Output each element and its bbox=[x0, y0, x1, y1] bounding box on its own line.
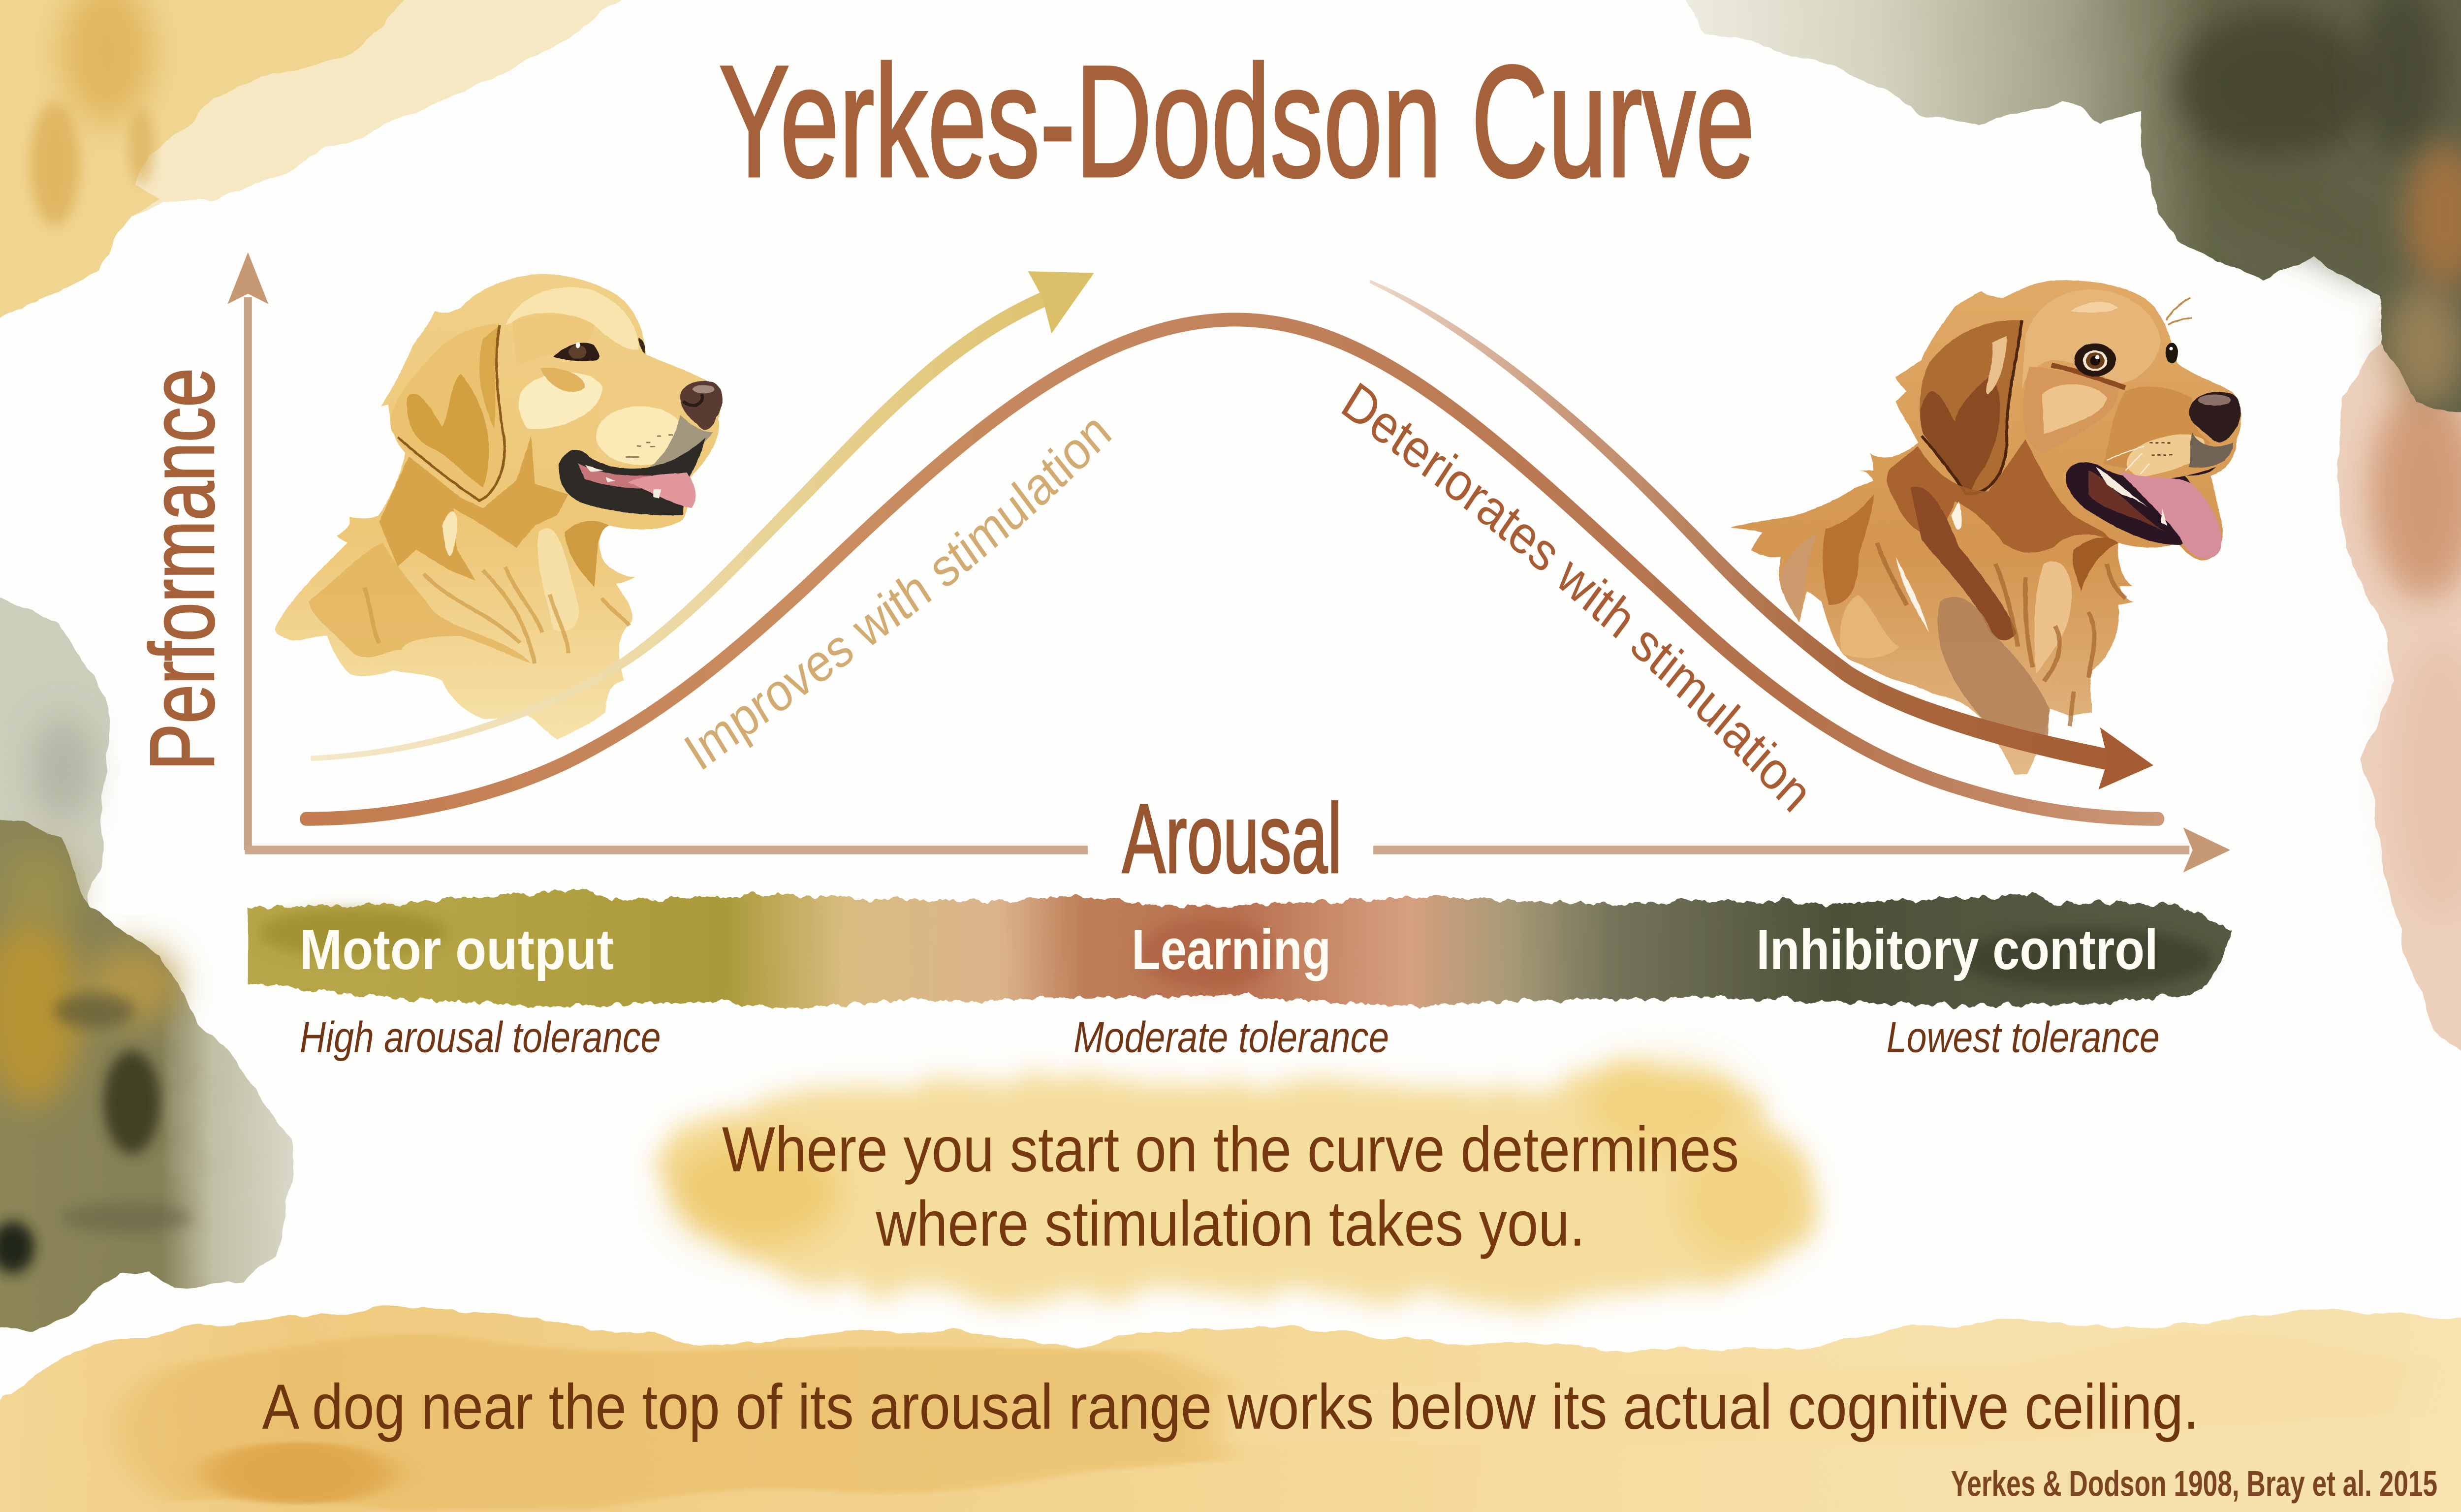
watercolor wash: top-left bbox=[0, 0, 625, 321]
dog 2 wide eye bbox=[2074, 343, 2178, 377]
watercolor wash: left bbox=[0, 598, 293, 1332]
dog: calm golden retriever bbox=[275, 274, 723, 739]
banner: functions by arousal tolerance bbox=[246, 889, 2232, 1009]
dog 2 silhouette bbox=[1731, 280, 2241, 774]
yellow arrow: improves bbox=[311, 271, 1094, 761]
brown arrow: deteriorates bbox=[1370, 280, 2153, 789]
dog 1 ear bbox=[390, 323, 505, 501]
banner label: motor output: Motor output bbox=[300, 918, 614, 981]
y axis label: Performance bbox=[131, 368, 233, 770]
dog 2 ear bbox=[1920, 320, 2021, 495]
tolerance note: lowest: Lowest tolerance bbox=[1887, 1013, 2160, 1061]
dog 2 nose bbox=[2189, 392, 2240, 442]
dog 1 face markings bbox=[505, 287, 713, 467]
dog 2 whisker hairs bbox=[2166, 298, 2192, 325]
conclusion statement bbox=[722, 1114, 1739, 1260]
dog 2 open mouth and tongue bbox=[2066, 462, 2221, 559]
bell curve bbox=[306, 319, 2158, 819]
banner label: learning: Learning bbox=[1132, 918, 1331, 981]
x axis label: Arousal bbox=[1122, 783, 1342, 893]
dog 2 neck fur bbox=[1781, 440, 2125, 743]
deteriorates text: Deteriorates with stimulation bbox=[1341, 382, 1805, 813]
improves text: Improves with stimulation bbox=[684, 420, 1112, 770]
x axis bbox=[245, 827, 2230, 873]
tolerance note: high: High arousal tolerance bbox=[300, 1013, 661, 1061]
dog 1 nose bbox=[680, 381, 723, 430]
dog: over-aroused golden retriever bbox=[1731, 280, 2241, 774]
conclusion statement: Where you start on the curve determines bbox=[722, 1114, 1739, 1185]
watercolor wash: top-right bbox=[1678, 0, 2461, 414]
watercolor band: bottom takeaway bbox=[0, 1308, 2461, 1512]
banner label: inhibitory control: Inhibitory control bbox=[1756, 918, 2158, 981]
conclusion statement: where stimulation takes you. bbox=[875, 1189, 1585, 1260]
dog 1 eye bbox=[553, 338, 645, 361]
title: Yerkes-Dodson Curve bbox=[719, 33, 1755, 210]
y axis bbox=[227, 252, 268, 850]
dog 2 face markings bbox=[2021, 289, 2233, 477]
takeaway sentence: A dog near the top of its arousal range works below its actual cognitive ceiling. bbox=[262, 1372, 2199, 1443]
dog 1 neck fur bbox=[309, 436, 630, 663]
dog 1 silhouette bbox=[275, 274, 721, 739]
curve label path: deteriorates bbox=[1339, 411, 1868, 898]
tolerance note: moderate: Moderate tolerance bbox=[1073, 1013, 1389, 1061]
curve label path: improves bbox=[700, 356, 1193, 772]
watercolor wash: right terracotta bbox=[2338, 342, 2461, 1068]
dog 1 open mouth and tongue bbox=[559, 438, 705, 515]
watercolor blob behind conclusion statement bbox=[659, 1063, 1821, 1305]
